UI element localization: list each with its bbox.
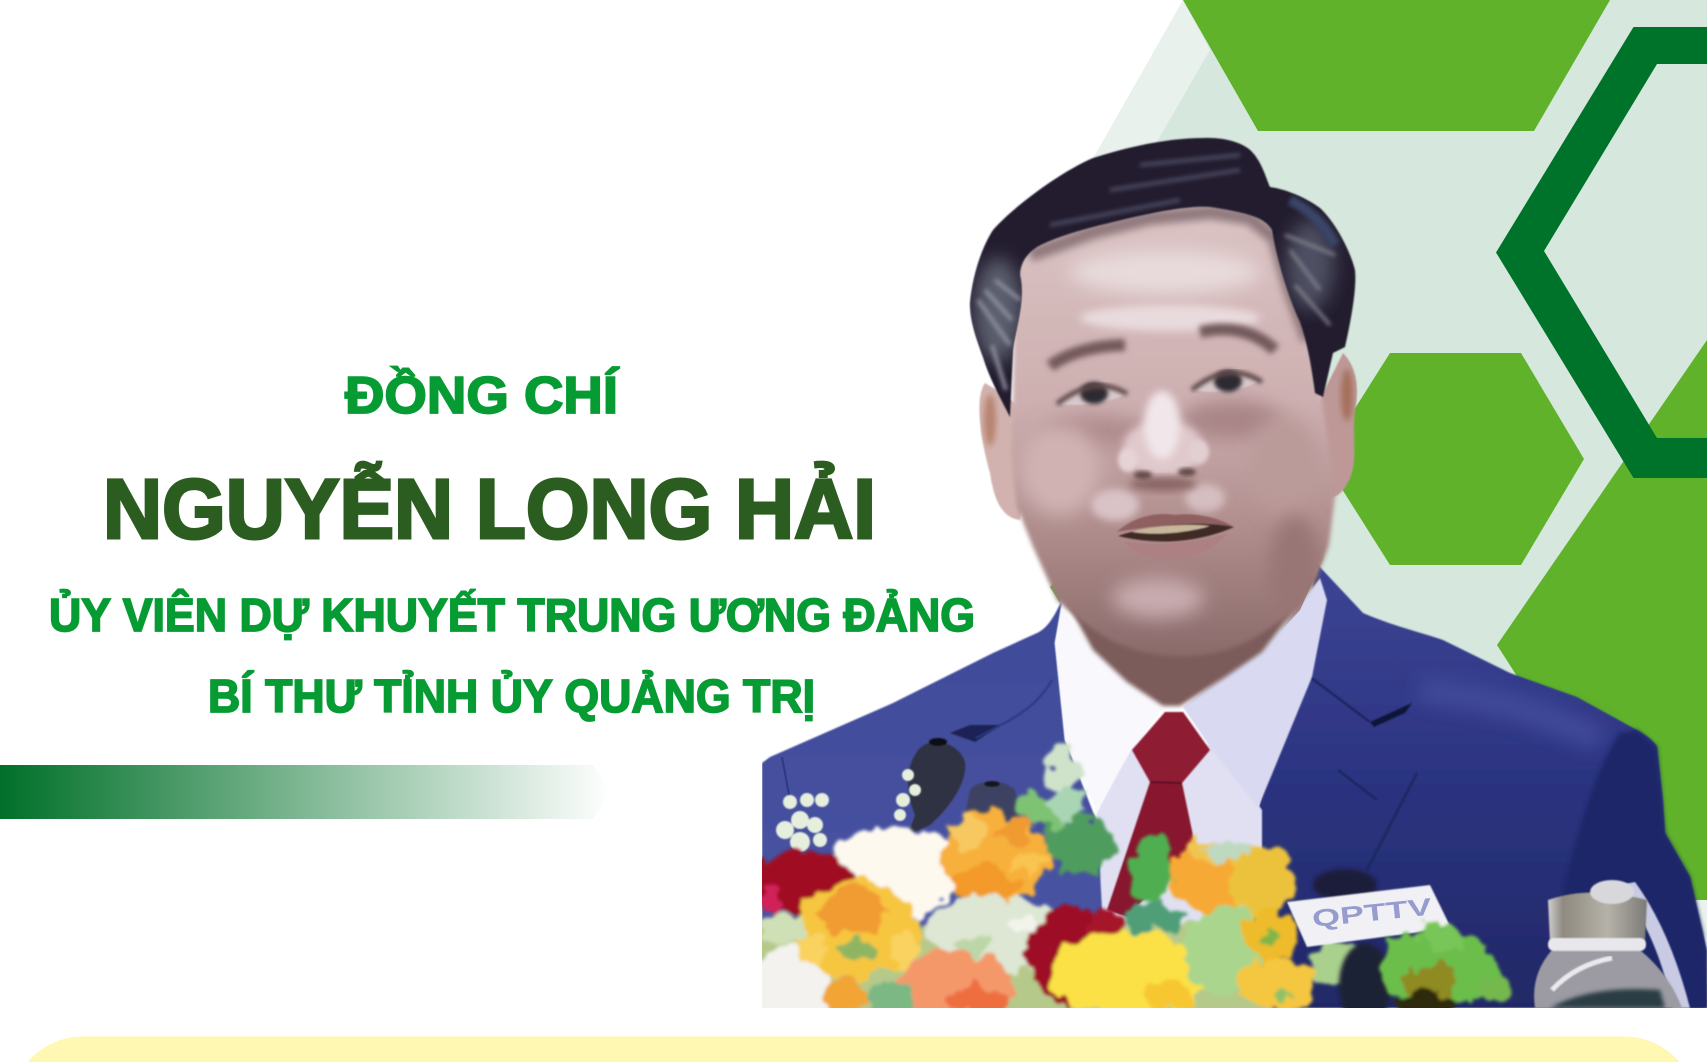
- hairline shading: [1030, 212, 1308, 340]
- flower bouquet: [762, 740, 1358, 1008]
- pale green left: [760, 916, 804, 944]
- subtitle: position line 2: BÍ THƯ TỈNH ỦY QUẢNG TRỊ: [208, 670, 815, 722]
- teal leaf: [1125, 904, 1185, 932]
- yellow panel: [28, 1036, 1680, 1062]
- white rose: [829, 824, 957, 920]
- eye right: [1192, 370, 1262, 392]
- collar left: [1054, 612, 1134, 802]
- jacket right: [1240, 565, 1707, 1008]
- leaf: [1012, 786, 1068, 834]
- leaf: [1047, 815, 1113, 875]
- hexagon background: pale outer layer: [1060, 0, 1240, 230]
- pale strip lower right: [1680, 900, 1707, 1008]
- pale green baby's breath: [925, 895, 1065, 971]
- hexagon outline: dark green: [1496, 27, 1707, 478]
- hexagon background: light green layer: [1110, 0, 1707, 905]
- facial shading: [1020, 250, 1321, 625]
- red rose centre: [1030, 905, 1114, 1005]
- hexagon: top green: [1183, 0, 1610, 131]
- orange flower: [941, 812, 1049, 904]
- pale right sprig: [1203, 840, 1247, 860]
- jacket shading and seams: [782, 677, 1707, 1008]
- neck: [1060, 560, 1320, 706]
- name tag: QPTTV: [1311, 894, 1433, 933]
- green foliage right: [1380, 922, 1515, 1014]
- eye left: [1057, 382, 1127, 405]
- shirt: [1096, 744, 1263, 926]
- sliver: green behind neck: [1050, 580, 1062, 603]
- orange right: [1170, 842, 1254, 914]
- title: name: NGUYỄN LONG HẢI: [103, 462, 876, 556]
- subtitle: position line 1: ỦY VIÊN DỰ KHUYẾT TRUNG ƯƠNG ĐẢNG: [49, 589, 975, 641]
- red rose left: [751, 851, 855, 915]
- hair highlights: [974, 155, 1335, 390]
- mic tip behind tag: [1313, 869, 1377, 901]
- face: [1012, 195, 1335, 656]
- bouquet base: [750, 925, 1270, 1025]
- yellow sunflower: [794, 882, 922, 978]
- mouth: [1118, 514, 1234, 546]
- heading: đồng chí: ĐỒNG CHÍ: [345, 366, 620, 425]
- bright yellow flower: [1050, 931, 1206, 1019]
- sunflower right: [1244, 907, 1296, 963]
- leaf: [1048, 793, 1088, 817]
- hexagon: large green right: [1497, 340, 1707, 900]
- ear right: [1320, 352, 1358, 497]
- portrait photo illustration: [748, 138, 1707, 1034]
- green lower: [866, 980, 916, 1008]
- salmon flower: [900, 953, 1016, 1017]
- water bottle: [1534, 880, 1690, 1008]
- orange lower: [821, 977, 869, 1013]
- pale leaf top: [1049, 740, 1077, 800]
- dark mass under name tag: [1339, 943, 1391, 1027]
- ear left: [978, 382, 1021, 520]
- hair: [970, 138, 1355, 417]
- pale green right: [1185, 904, 1265, 996]
- eyebrows: [1050, 329, 1275, 366]
- hexagon: middle green: [1323, 353, 1584, 565]
- name tag: [1287, 885, 1451, 947]
- tie leaf: [1127, 828, 1179, 908]
- white bottom left: [762, 940, 834, 1008]
- jacket left: [762, 602, 1103, 930]
- baby's breath sprigs: [776, 769, 921, 852]
- microphone 1: [908, 738, 965, 835]
- collar right: [1183, 578, 1327, 808]
- microphone 2: [965, 780, 1020, 822]
- tie: [1107, 712, 1210, 917]
- gradient arrow bar: [0, 765, 612, 819]
